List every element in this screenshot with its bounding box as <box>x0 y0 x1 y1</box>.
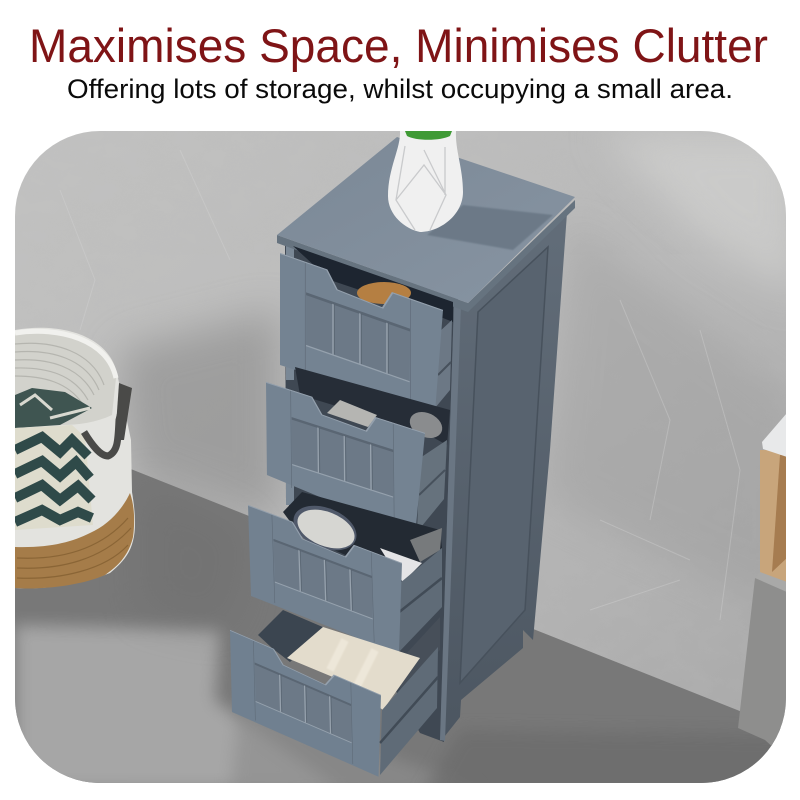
cabinet top <box>277 200 575 312</box>
wall <box>15 131 800 783</box>
drawer 4 <box>230 610 440 779</box>
drawer 1 <box>280 246 453 422</box>
cabinet <box>230 131 575 779</box>
cabinet carcass <box>285 240 458 742</box>
right-hand cabinet <box>738 413 787 760</box>
title: Maximises Space, Minimises Clutter <box>29 19 768 72</box>
vase <box>388 131 463 232</box>
basket <box>15 328 135 588</box>
chevron blanket <box>15 388 93 530</box>
subtitle: Offering lots of storage, whilst occupying a small area. <box>67 74 733 104</box>
drawer 2 <box>266 367 450 540</box>
cabinet side <box>440 213 567 741</box>
floor <box>15 469 781 783</box>
woven base <box>15 493 134 588</box>
basket handle <box>81 414 121 460</box>
drawer 3 <box>248 492 442 657</box>
